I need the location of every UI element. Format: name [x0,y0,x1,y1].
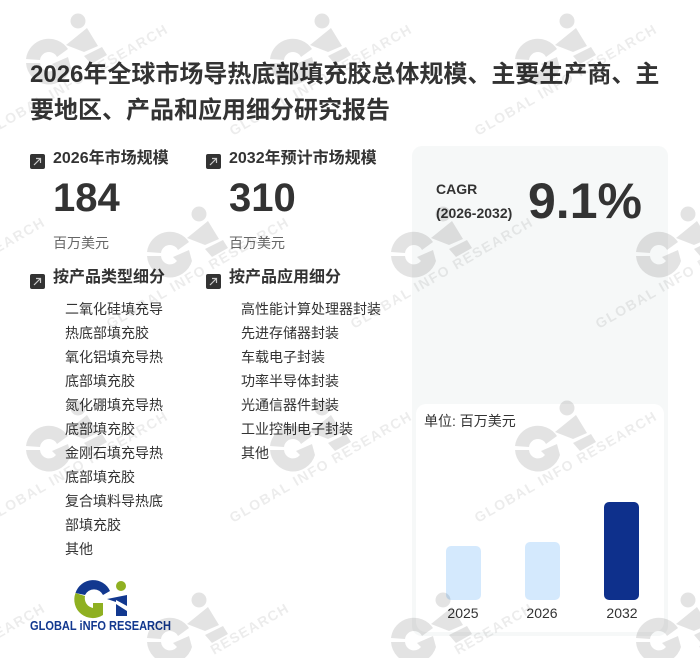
list: product types: 其他 [65,541,93,557]
number: CAGR value: 9.1% [528,173,642,229]
panel: CAGR and chart card [412,146,668,636]
heading: 2032 market size: 2032年预计市场规模 [229,150,377,167]
text: CAGR label: (2026-2032) [436,205,512,221]
watermark pattern: GLOBAL INFO RESEARCH [226,408,414,526]
list: product types: 金刚石填充导热 [65,445,163,461]
watermark pattern: RESEARCH [208,600,291,658]
bar: 2026 [525,542,560,600]
title: 2026年全球市场导热底部填充胶总体规模、主要生产商、主 [30,61,659,88]
list: product types: 氧化铝填充导热 [65,349,163,365]
list: product types: 部填充胶 [65,517,121,533]
icon: arrow product type [30,274,45,289]
text: CAGR label [436,181,512,221]
icon: arrow 2026 [30,154,45,169]
title [30,61,659,124]
watermark pattern: RESEARCH [452,600,535,658]
icon: arrow 2032 [206,154,221,169]
logo: Global Info Research [30,580,171,633]
watermark pattern: GLOBAL INFO RESEARCH [472,21,659,139]
watermark pattern: GLOBAL INFO RESEARCH [472,408,659,526]
panel: segmentation by application [206,268,381,461]
axis label: 2025: 2025 [447,605,479,621]
list: product types: 氮化硼填充导热 [65,397,163,413]
list: applications: 车载电子封装 [241,349,325,365]
list: product types: 底部填充胶 [65,421,135,437]
bar: 2032 [604,502,639,600]
list: applications [241,301,381,461]
list: applications: 先进存储器封装 [241,325,339,341]
heading: 2026 market size: 2026年市场规模 [53,150,169,167]
heading: application: 按产品应用细分 [229,269,341,286]
list: product types: 底部填充胶 [65,373,135,389]
list: product types: 热底部填充胶 [65,325,149,341]
unit: 2026: 百万美元 [53,235,109,251]
list: applications: 其他 [241,445,269,461]
watermark pattern: GLOBAL INFO RESEARCH [348,214,535,332]
icon: arrow application [206,274,221,289]
axis label: 2032: 2032 [606,605,638,621]
chart unit label: 单位: 百万美元 [424,413,516,429]
bar chart [416,404,664,632]
bar: 2025 [446,546,481,600]
number: 184: 184 [53,176,120,220]
watermark pattern: GLOBAL INFO RESEARCH [104,214,291,332]
list: product types: 复合填料导热底 [65,493,163,509]
list: product types [65,301,163,557]
title: 要地区、产品和应用细分研究报告 [30,97,390,124]
panel: 2026 market size [30,149,169,251]
watermark pattern: GLOBAL INFO RESEARCH [226,21,414,139]
list: applications: 功率半导体封装 [241,373,339,389]
heading: product type: 按产品类型细分 [53,269,165,286]
number: 310: 310 [229,176,296,220]
list: applications: 高性能计算处理器封装 [241,301,381,317]
unit: 2032: 百万美元 [229,235,285,251]
panel: segmentation by product type [30,268,165,557]
axis label: 2026: 2026 [526,605,558,621]
list: product types: 二氧化硅填充导 [65,301,163,317]
list: applications: 工业控制电子封装 [241,421,353,437]
panel: 2032 market size [206,149,377,251]
list: applications: 光通信器件封装 [241,397,339,413]
list: product types: 底部填充胶 [65,469,135,485]
text: CAGR label: CAGR [436,181,477,197]
